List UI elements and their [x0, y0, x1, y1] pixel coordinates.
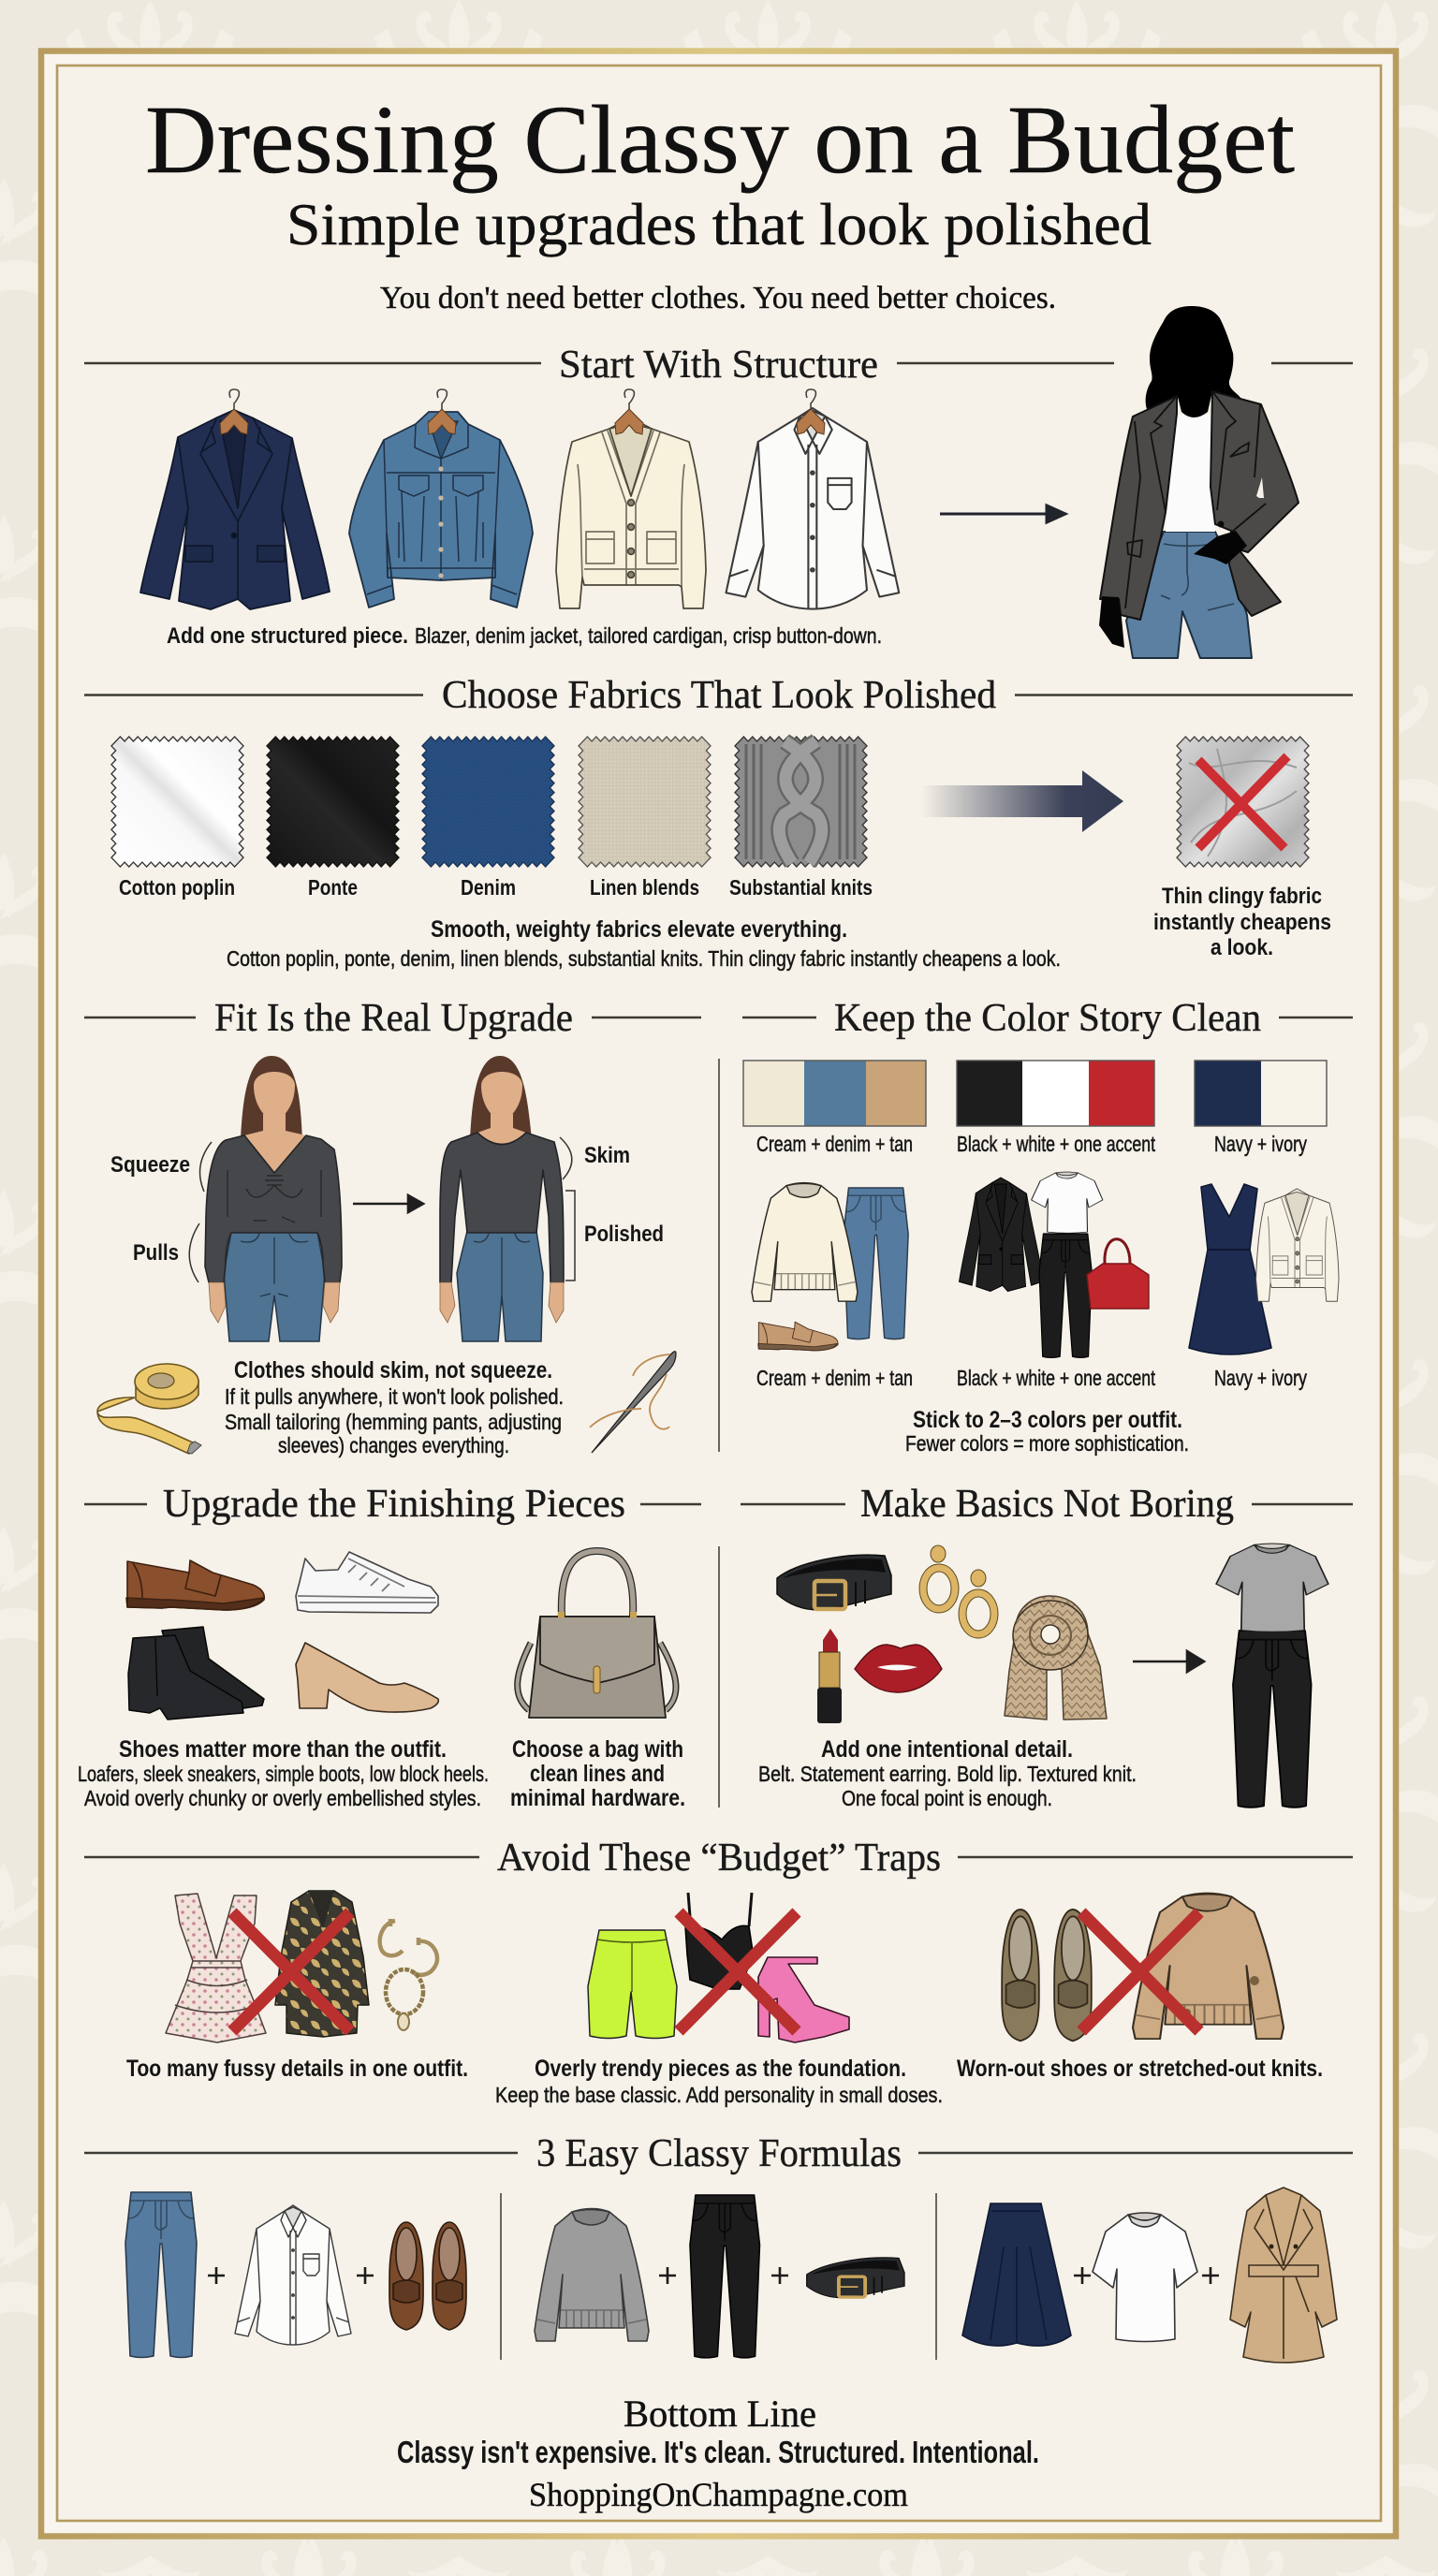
palette labels: Black + white + one accent: [957, 1132, 1155, 1156]
outfit labels: Cream + denim + tan: [756, 1366, 913, 1390]
outfit: navy dress, ivory cardigan: [1189, 1184, 1339, 1354]
caption: color rule: [905, 1407, 1189, 1456]
bottom line: Bottom Line: [624, 2393, 816, 2435]
caption: color rule: Stick to 2–3 colors per outfit.: [913, 1407, 1182, 1433]
note: thin clingy fabric: instantly cheapens: [1153, 910, 1331, 935]
heading: basics: Make Basics Not Boring: [860, 1483, 1234, 1526]
caption: fit: Clothes should skim, not squeeze.: [234, 1357, 552, 1383]
title: Dressing Classy on a Budget: [145, 86, 1295, 194]
swatch: ponte: [267, 737, 399, 867]
panel: start with structure: [84, 306, 1353, 658]
caption: fit: [225, 1357, 564, 1457]
heading: formulas: 3 Easy Classy Formulas: [536, 2132, 902, 2175]
fabric labels: [119, 875, 873, 900]
icon: measuring tape: [97, 1364, 201, 1454]
caption: traps: Worn-out shoes or stretched-out knits.: [957, 2056, 1323, 2082]
callouts: fit labels: [110, 1137, 664, 1282]
outfit: cream sweater, jeans, loafers: [752, 1183, 908, 1351]
figure: tight top: [205, 1056, 342, 1341]
formula 3: skirt, tee, trench: [962, 2188, 1337, 2363]
bottom line: Classy isn't expensive. It's clean. Structured. Intentional.: [397, 2435, 1039, 2469]
callouts: fit labels: Polished: [584, 1222, 664, 1247]
trap: fussy details: [166, 1891, 437, 2042]
caption: basics: One focal point is enough.: [842, 1786, 1052, 1810]
palette labels: Cream + denim + tan: [756, 1132, 913, 1156]
fabric labels: Ponte: [308, 875, 358, 900]
panel: finishing pieces: [78, 1483, 701, 1811]
heading: color story: Keep the Color Story Clean: [834, 997, 1261, 1040]
palette: navy ivory: [1195, 1061, 1327, 1126]
caption: structured piece: [167, 623, 882, 649]
caption: structured piece: Add one structured piece.: [167, 623, 408, 649]
callouts: fit labels: Skim: [584, 1143, 630, 1168]
tagline: You don't need better clothes. You need better choices.: [380, 281, 1056, 315]
icon: gold earrings: [923, 1545, 994, 1634]
palette labels: Navy + ivory: [1214, 1132, 1307, 1156]
icon: black boots: [128, 1627, 264, 1720]
heading: fit: Fit Is the Real Upgrade: [214, 997, 573, 1040]
caption: fabrics: Cotton poplin, ponte, denim, linen blends, substantial knits. Thin clingy fabric instantly cheapens a look.: [227, 946, 1061, 971]
outfit labels: Black + white + one accent: [957, 1366, 1155, 1390]
icon: textured scarf: [1005, 1596, 1107, 1720]
fabric labels: Linen blends: [590, 875, 699, 900]
swatch: substantial knit: [735, 737, 867, 867]
icon: denim jacket on hanger: [349, 389, 533, 607]
icon: nude heel: [296, 1643, 438, 1712]
note: thin clingy fabric: [1153, 884, 1331, 960]
gradient arrow: [921, 770, 1123, 832]
icon: cream cardigan on hanger: [556, 389, 706, 608]
caption: color rule: Fewer colors = more sophistication.: [905, 1431, 1189, 1456]
heading: finishing pieces: Upgrade the Finishing Pieces: [163, 1483, 625, 1526]
subtitle: Simple upgrades that look polished: [286, 191, 1152, 257]
swatch: cotton poplin: [111, 737, 243, 867]
caption: bag: clean lines and: [530, 1761, 665, 1787]
caption: fit: Small tailoring (hemming pants, adjusting: [225, 1410, 562, 1434]
figure: woman in blazer: [1099, 306, 1299, 658]
arrow: basics to outfit: [1133, 1651, 1204, 1672]
caption: shoes: [78, 1736, 489, 1810]
icon: white button-down on hanger: [726, 389, 899, 609]
trap: worn-out items: [1002, 1893, 1284, 2041]
callouts: fit labels: Squeeze: [110, 1152, 190, 1178]
note: thin clingy fabric: a look.: [1211, 935, 1273, 960]
caption: bag: Choose a bag with: [512, 1736, 683, 1763]
panel: fabrics: [84, 674, 1353, 971]
caption: basics: Belt. Statement earring. Bold lip. Textured knit.: [758, 1762, 1137, 1786]
palette: cream denim tan: [743, 1061, 926, 1126]
caption: fabrics: Smooth, weighty fabrics elevate everything.: [431, 916, 847, 943]
caption: bag: minimal hardware.: [510, 1785, 685, 1811]
icon: taupe handbag: [518, 1551, 676, 1718]
caption: traps: Overly trendy pieces as the foundation.: [535, 2056, 906, 2082]
figure: well fitted top: [440, 1056, 564, 1341]
fabric labels: Denim: [461, 875, 516, 900]
heading: budget traps: Avoid These “Budget” Traps: [497, 1837, 941, 1880]
arrow to outfit: [940, 505, 1065, 522]
divider: [501, 1059, 936, 2360]
icon: navy blazer on hanger: [140, 389, 330, 609]
caption: traps: Too many fussy details in one outfit.: [126, 2056, 468, 2082]
panel: basics: [741, 1483, 1353, 1810]
caption: shoes: Loafers, sleek sneakers, simple boots, low block heels.: [78, 1762, 489, 1786]
fabric labels: Substantial knits: [729, 875, 873, 900]
heading: fabrics: Choose Fabrics That Look Polished: [442, 674, 996, 717]
fabric labels: Cotton poplin: [119, 875, 235, 900]
caption: basics: [758, 1736, 1137, 1810]
swatch: linen blend: [579, 737, 711, 867]
icon: needle and thread: [590, 1352, 676, 1453]
caption: basics: Add one intentional detail.: [821, 1736, 1073, 1763]
formula 1: jeans, shirt, loafers: [125, 2192, 466, 2357]
panel: formulas: [84, 2132, 1353, 2363]
caption: structured piece: Blazer, denim jacket, tailored cardigan, crisp button-down.: [415, 623, 882, 648]
icon: red lips: [855, 1645, 942, 1692]
outfit labels: [756, 1366, 1307, 1390]
panel: budget traps: [84, 1837, 1353, 2107]
swatch: denim: [422, 737, 554, 867]
caption: shoes: Shoes matter more than the outfit.: [119, 1736, 447, 1763]
outfit labels: Navy + ivory: [1214, 1366, 1307, 1390]
callouts: fit labels: Pulls: [133, 1240, 179, 1266]
heading: start with structure: Start With Structure: [559, 344, 878, 387]
caption: fit: sleeves) changes everything.: [278, 1433, 509, 1457]
panel: color story: [742, 997, 1353, 1456]
trap: trendy pieces: [588, 1893, 849, 2042]
formula 2: sweater, trousers, belt: [535, 2195, 904, 2358]
caption: fabrics: [227, 916, 1061, 971]
caption: shoes: Avoid overly chunky or overly embellished styles.: [84, 1786, 481, 1810]
palette labels: [756, 1132, 1307, 1156]
arrow: before to after: [353, 1195, 423, 1212]
palette: black white accent: [957, 1061, 1154, 1126]
caption: fit: If it pulls anywhere, it won't look polished.: [225, 1384, 564, 1409]
figure: grey tee and black pants: [1216, 1544, 1328, 1808]
bottom line: [397, 2393, 1039, 2513]
plus signs: [208, 2267, 1219, 2284]
icon: black belt: [777, 1555, 891, 1610]
icon: red lipstick: [817, 1629, 842, 1723]
caption: bag: [510, 1736, 685, 1811]
panel: fit: [84, 997, 701, 1457]
icon: white sneaker: [296, 1552, 438, 1613]
note: thin clingy fabric: Thin clingy fabric: [1162, 884, 1322, 909]
swatch: clingy fabric crossed out: [1177, 737, 1309, 867]
caption: traps: Keep the base classic. Add personality in small doses.: [495, 2083, 943, 2107]
outfit: blazer, tee, trousers, red bag: [959, 1172, 1149, 1357]
icon: brown loafer: [126, 1560, 264, 1610]
caption: traps: [126, 2056, 1323, 2107]
bottom line: ShoppingOnChampagne.com: [529, 2476, 908, 2513]
